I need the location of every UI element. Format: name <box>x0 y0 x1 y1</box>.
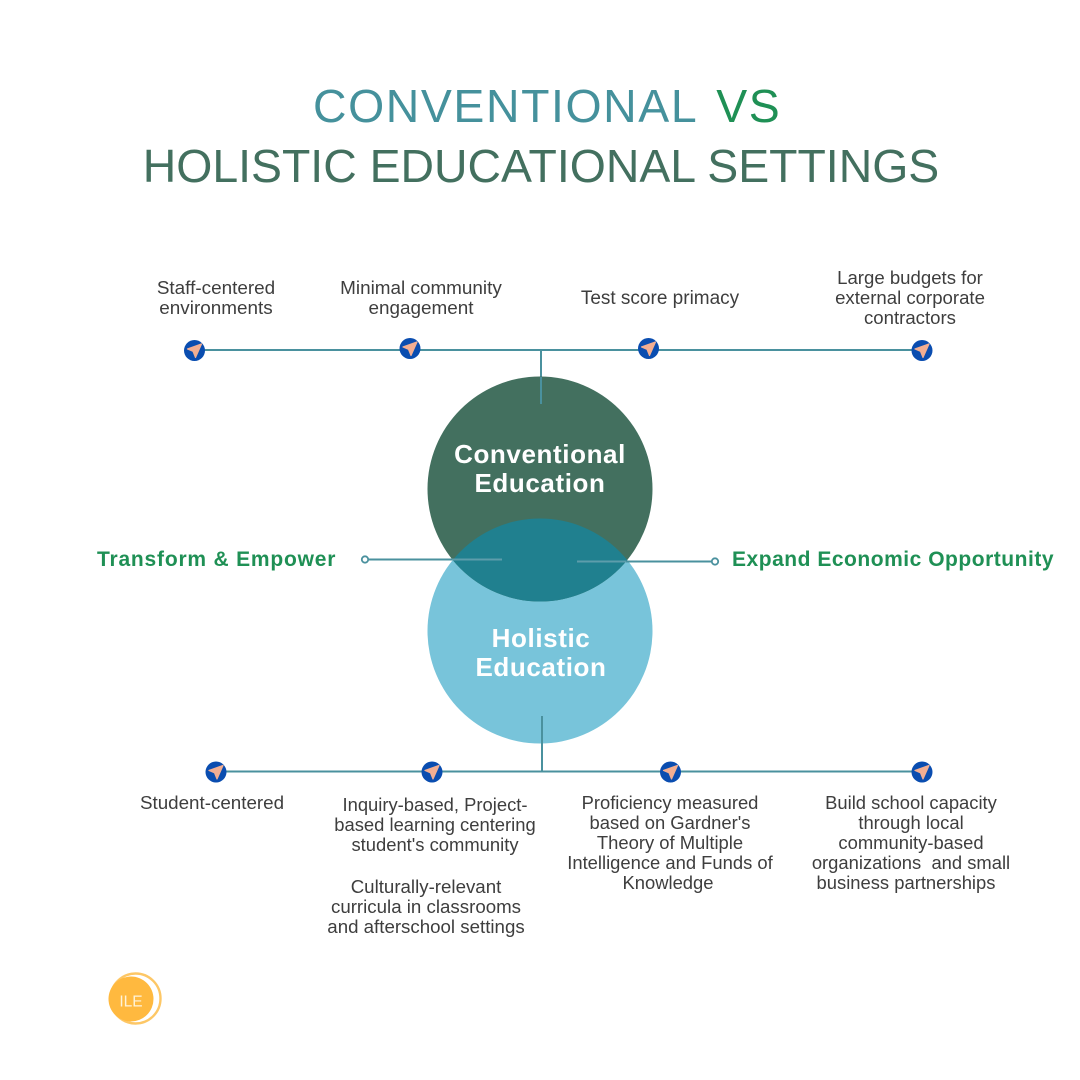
bottom item 3: Intelligence and Funds of <box>567 852 773 873</box>
bottom item 2b: curricula in classrooms <box>331 896 521 917</box>
logo <box>108 974 160 1024</box>
bottom item 4: business partnerships <box>817 872 995 893</box>
bottom item 3: Theory of Multiple <box>597 832 743 853</box>
top vertical connector overlay <box>540 377 542 404</box>
bottom item 3: Proficiency measured <box>582 792 758 813</box>
holistic label <box>475 623 607 682</box>
conventional label <box>454 439 626 498</box>
right connector <box>577 558 718 565</box>
holistic circle <box>428 518 652 744</box>
bottom item 1: Student-centered <box>140 792 284 813</box>
top item 1 <box>157 278 275 319</box>
bottom item 3 <box>567 792 773 893</box>
top item 1: environments <box>159 298 273 319</box>
top item 1: Staff-centered <box>157 278 275 299</box>
top pin icons <box>184 338 932 361</box>
bottom item 2b <box>327 876 525 937</box>
bottom item 2b: Culturally-relevant <box>351 876 501 897</box>
conventional circle <box>428 376 652 602</box>
bottom item 4: through local <box>858 812 964 833</box>
bottom item 2: based learning centering <box>334 814 536 835</box>
left side label: Transform & Empower <box>97 548 336 571</box>
top item 3: Test score primacy <box>581 288 739 309</box>
bottom timeline <box>216 716 922 772</box>
bottom item 3: based on Gardner's <box>590 812 750 833</box>
top item 2 <box>340 278 502 319</box>
top item 4: Large budgets for <box>837 267 983 288</box>
holistic label: Education <box>475 652 607 682</box>
bottom item 4: community-based <box>838 832 984 853</box>
conventional label: Education <box>474 468 606 498</box>
bottom item 3: Knowledge <box>622 872 714 893</box>
logo: ILE <box>119 994 143 1010</box>
top item 2: Minimal community <box>340 278 502 299</box>
left connector <box>362 556 502 563</box>
bottom item 4: Build school capacity <box>825 792 997 813</box>
venn diagram and connectors <box>108 338 932 1025</box>
bottom item 2: Inquiry-based, Project- <box>342 794 528 815</box>
title: CONVENTIONAL VS <box>313 80 781 132</box>
bottom item 4: organizations and small <box>812 852 1010 873</box>
right side label: Expand Economic Opportunity <box>732 548 1054 571</box>
bottom item 2: student's community <box>351 834 519 855</box>
top item 4: contractors <box>864 307 956 328</box>
title <box>143 80 939 192</box>
bottom item 4 <box>812 792 1010 893</box>
holistic label: Holistic <box>492 623 590 653</box>
title: HOLISTIC EDUCATIONAL SETTINGS <box>143 140 939 192</box>
circle overlap <box>453 518 628 602</box>
bottom item 2 <box>334 794 536 855</box>
bottom item 2b: and afterschool settings <box>327 916 525 937</box>
top item 4 <box>835 267 985 328</box>
conventional label: Conventional <box>454 439 626 469</box>
top item 4: external corporate <box>835 287 985 308</box>
top timeline <box>194 350 922 404</box>
top item 2: engagement <box>368 298 474 319</box>
bottom pin icons <box>206 762 932 782</box>
